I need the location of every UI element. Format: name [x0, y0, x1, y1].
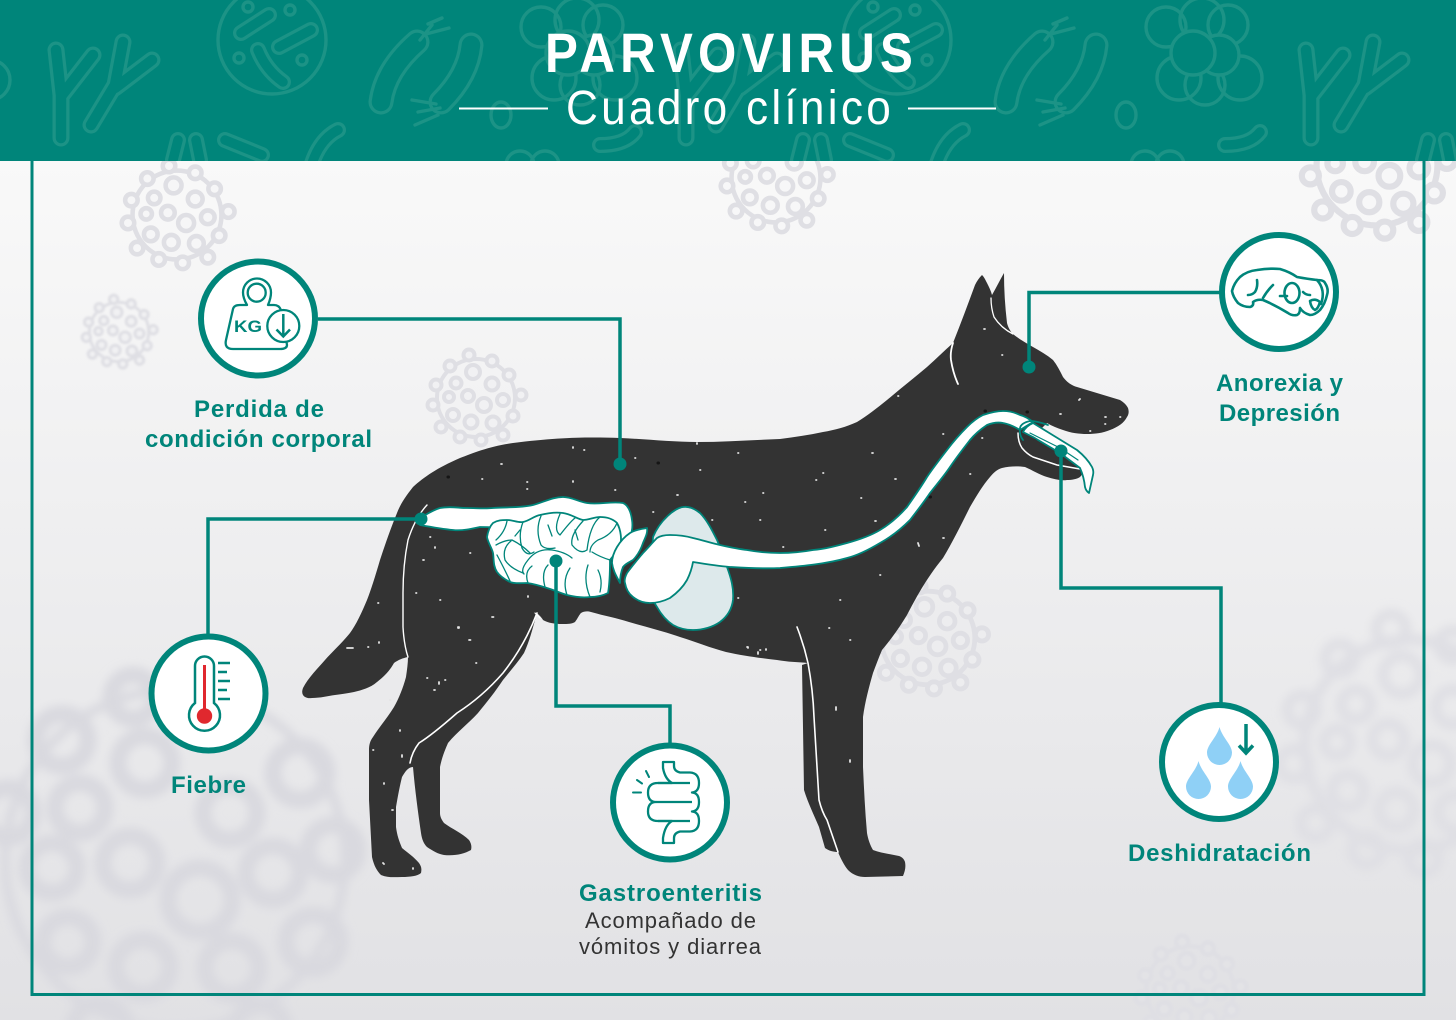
label: gastroenteritis: Gastroenteritis	[579, 880, 762, 907]
label: anorexia y depresión	[1216, 370, 1344, 427]
icon: water drops	[1162, 705, 1276, 819]
header banner	[0, 0, 1456, 161]
title: PARVOVIRUS	[545, 22, 913, 85]
pancreas crescent	[612, 528, 647, 583]
tongue and mouth	[1018, 421, 1093, 493]
label: fiebre: Fiebre	[171, 772, 246, 799]
connector: anorexia y depresión	[1022, 292, 1220, 374]
connector: fiebre	[208, 512, 428, 634]
icon: weight loss	[201, 262, 315, 376]
large intestine	[420, 497, 632, 547]
stomach pale organ	[650, 507, 733, 630]
icon: thermometer	[152, 636, 266, 750]
icon: intestine	[613, 746, 727, 860]
label: perdida de condición corporal: condición corporal	[145, 426, 372, 453]
label: gastroenteritis	[579, 880, 762, 959]
label: deshidratación: Deshidratación	[1128, 840, 1311, 867]
dog silhouette	[302, 273, 1129, 877]
label: gastroenteritis: Acompañado de	[585, 908, 756, 933]
connector: gastroenteritis	[550, 554, 670, 743]
label: perdida de condición corporal	[145, 396, 372, 453]
digestive system	[420, 411, 1093, 630]
small intestine	[487, 513, 621, 597]
label: perdida de condición corporal: Perdida de	[194, 396, 324, 423]
icon: weight loss: KG	[234, 318, 262, 336]
connector: deshidratación	[1054, 444, 1221, 703]
frame	[32, 161, 1424, 994]
icon: sleeping dog	[1222, 235, 1336, 349]
label: anorexia y depresión: Depresión	[1219, 400, 1340, 427]
subtitle: Cuadro clínico	[566, 80, 891, 134]
connector: perdida de condición corporal	[318, 319, 626, 470]
label: gastroenteritis: vómitos y diarrea	[579, 934, 762, 959]
stomach and esophagus	[625, 411, 1033, 603]
label: anorexia y depresión: Anorexia y	[1216, 370, 1344, 397]
dog contour lines	[403, 298, 1013, 852]
dog texture specks	[347, 329, 1120, 869]
